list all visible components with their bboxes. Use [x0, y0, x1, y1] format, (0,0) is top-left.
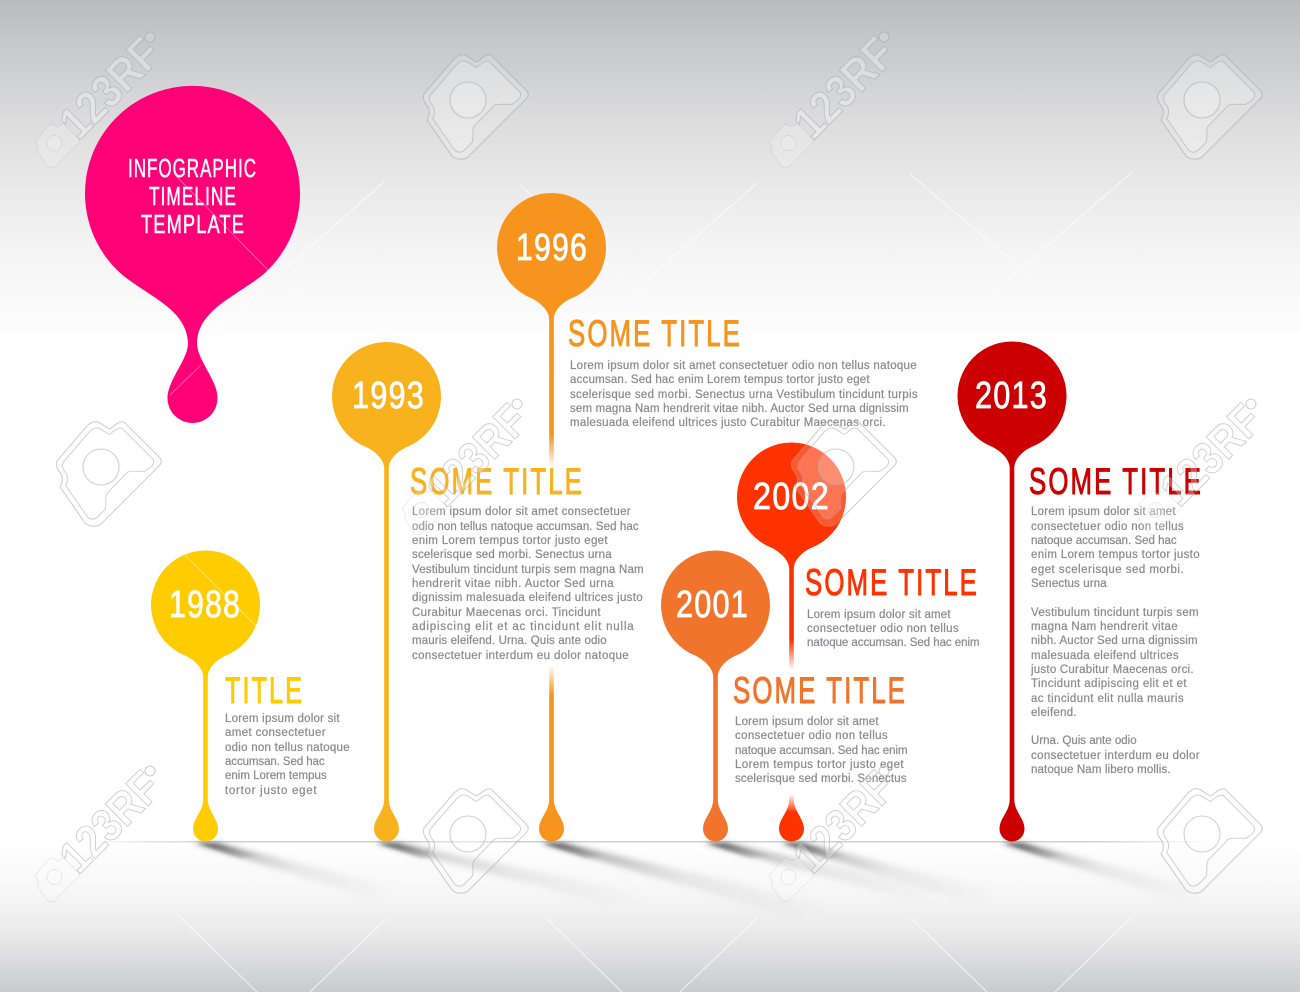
text block 1988: accumsan. Sed hac [225, 756, 325, 768]
watermark text 4: 123RF [1150, 394, 1271, 515]
heading 1993: SOME TITLE [410, 461, 584, 502]
text block 2001: natoque accumsan. Sed hac enim [735, 745, 908, 757]
floor line [80, 841, 1220, 842]
watermark icon 6 [1157, 789, 1262, 893]
watermark text 6 [770, 761, 904, 902]
text block 2013: Senectus urna [1031, 578, 1107, 590]
text block 1996: malesuada eleifend ultrices justo Curabitur Maecenas orci. [570, 417, 886, 429]
heading 1996: SOME TITLE [568, 313, 742, 354]
text block 1988: enim Lorem tempus [225, 770, 327, 782]
text block 1993: consectetuer interdum eu dolor natoque [412, 650, 629, 662]
text block 2001: Lorem ipsum dolor sit amet [735, 716, 879, 728]
heading 2013: SOME TITLE [1029, 461, 1203, 502]
text block 1988: odio non tellus natoque [225, 742, 350, 754]
watermark icon 1 [423, 55, 528, 159]
watermark text 2: 123RF [783, 27, 904, 148]
watermark icon 2 [1157, 55, 1262, 159]
marker 1988 [151, 551, 260, 842]
text block 1993: dignissim malesuada eleifend ultrices justo [412, 592, 643, 604]
text block 2013: ac tincidunt elit nulla mauris [1031, 693, 1184, 705]
year 1988: 1988 [169, 584, 241, 626]
watermark text 5 [36, 761, 170, 902]
text block 2002: natoque accumsan. Sed hac enim [807, 637, 980, 649]
text block 2013 [1030, 506, 1200, 776]
marker 2001 [661, 551, 770, 842]
marker 2013 [957, 342, 1066, 842]
milestone 1996 [497, 193, 918, 841]
text block 2001: consectetuer odio non tellus [735, 730, 888, 742]
text block 2002 [807, 609, 980, 649]
watermark icon 4 [791, 422, 896, 526]
watermark text 3: 123RF [416, 394, 537, 515]
main title [128, 155, 257, 239]
watermark text 1 [36, 27, 170, 168]
text block 2013: natoque accumsan. Sed hac [1031, 535, 1177, 547]
text block 1993: hendrerit vitae nibh. Auctor Sed urna [412, 578, 614, 590]
icon: pink title drop [85, 86, 300, 423]
milestone 2013 [957, 342, 1203, 842]
text block 2013: magna Nam hendrerit vitae [1031, 621, 1178, 633]
heading 2001: SOME TITLE [733, 670, 907, 711]
text block 1993: adipiscing elit et ac tincidunt elit nulla [412, 621, 634, 633]
text block 1996: Lorem ipsum dolor sit amet consectetuer odio non tellus natoque [570, 360, 917, 372]
text block 1988: amet consectetuer [225, 727, 326, 739]
text block 1993 [412, 506, 644, 662]
text block 1993: Vestibulum tincidunt turpis sem magna Nam [412, 564, 644, 576]
text block 2013: consectetuer interdum eu dolor [1031, 750, 1200, 762]
text block 2013: consectetuer odio non tellus [1031, 521, 1184, 533]
watermark text 6: 123RF [783, 761, 904, 882]
milestone 2001 [661, 551, 908, 842]
year 1996: 1996 [516, 227, 588, 269]
main title: INFOGRAPHIC [128, 155, 257, 183]
title bubble [85, 86, 300, 423]
text block 1993: mauris eleifend. Urna. Quis ante odio [412, 635, 607, 647]
watermark text 3 [403, 394, 537, 535]
text block 2013: eget scelerisque sed morbi. [1031, 564, 1184, 576]
text block 2013: justo Curabitur Maecenas orci. [1030, 664, 1194, 676]
text block 2013: Tincidunt adipiscing elit et et [1031, 678, 1187, 690]
watermark text 5: 123RF [49, 761, 170, 882]
text block 1988 [225, 713, 350, 797]
text block 2013: malesuada eleifend ultrices [1031, 650, 1179, 662]
year 2013: 2013 [975, 375, 1048, 417]
text block 1993: Curabitur Maecenas orci. Tincidunt [412, 607, 601, 619]
cast shadows [193, 843, 1205, 918]
text block 2001: scelerisque sed morbi. Senectus [735, 773, 907, 785]
text block 2013: Lorem ipsum dolor sit amet [1031, 506, 1176, 518]
milestone 1993 [332, 342, 644, 842]
watermark text 4 [1137, 394, 1271, 535]
text block 1996: scelerisque sed morbi. Senectus urna Vestibulum tincidunt turpis [570, 389, 918, 401]
text block 1996: accumsan. Sed hac enim Lorem tempus tortor justo eget [570, 374, 870, 386]
main title: TIMELINE [149, 183, 237, 211]
marker 2002 [737, 443, 846, 842]
text block 2001: Lorem tempus tortor justo eget [735, 759, 904, 771]
year 2002: 2002 [753, 476, 830, 518]
watermark text 2 [770, 27, 904, 168]
heading 1988: TITLE [225, 670, 304, 711]
text block 2013: eleifend. [1031, 707, 1077, 719]
text block 1988: tortor justo eget [225, 785, 317, 797]
heading 2002: SOME TITLE [805, 562, 979, 603]
text block 1988: Lorem ipsum dolor sit [225, 713, 340, 725]
text block 2013: Vestibulum tincidunt turpis sem [1031, 607, 1199, 619]
watermark icon 3 [56, 422, 161, 526]
text block 2002: Lorem ipsum dolor sit amet [807, 609, 951, 621]
milestone 1988 [151, 551, 350, 842]
text block 1993: odio non tellus natoque accumsan. Sed hac [412, 521, 639, 533]
text block 1993: scelerisque sed morbi. Senectus urna [412, 549, 612, 561]
watermark icon 5 [423, 789, 528, 893]
text block 2001 [735, 716, 908, 785]
text block 2013: nibh. Auctor Sed urna dignissim [1031, 635, 1198, 647]
text block 1993: enim Lorem tempus tortor justo eget [412, 535, 608, 547]
marker 1996 [497, 193, 606, 841]
text block 1996 [570, 360, 918, 429]
marker 1993 [332, 342, 441, 842]
text block 1996: sem magna Nam hendrerit vitae nibh. Auctor Sed urna dignissim [570, 403, 909, 415]
text block 1993: Lorem ipsum dolor sit amet consectetuer [412, 506, 631, 518]
text block 2002: consectetuer odio non tellus [807, 623, 959, 635]
main title: TEMPLATE [141, 211, 245, 239]
year 1993: 1993 [352, 375, 425, 417]
text block 2013: enim Lorem tempus tortor justo [1031, 549, 1200, 561]
text block 2013: natoque Nam libero mollis. [1031, 764, 1171, 776]
milestone 2002 [737, 443, 980, 842]
watermark text 1: 123RF [49, 27, 170, 148]
text block 2013: Urna. Quis ante odio [1031, 735, 1137, 747]
year 2001: 2001 [676, 584, 749, 626]
